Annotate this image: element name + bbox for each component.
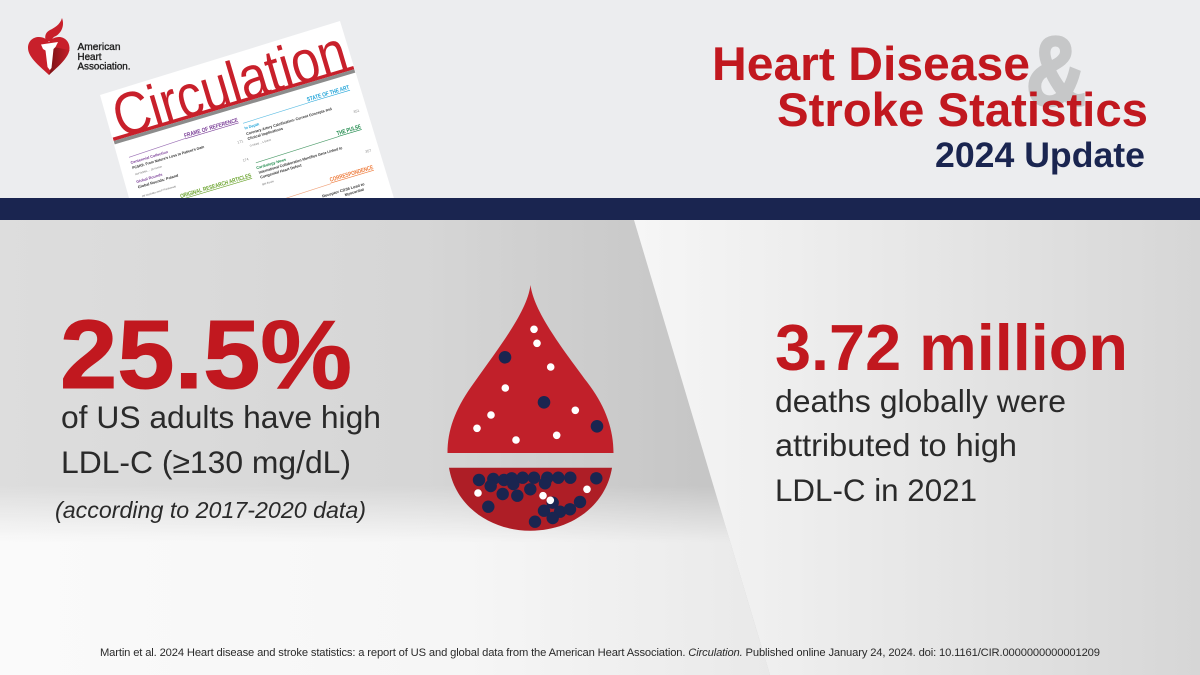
navy particles <box>473 351 603 528</box>
section: frame of reference: PCSK9: From Nature's Loss to Patient's Gain <box>132 145 205 170</box>
title block <box>712 16 1148 175</box>
section: the pulse <box>253 124 372 187</box>
section: frame of reference: JM Gierlotka and P Ponikowski <box>141 184 177 198</box>
description: deaths globally were <box>775 383 1066 419</box>
title line 1: Heart Disease <box>712 38 1030 91</box>
data note: (according to 2017-2020 data) <box>55 497 366 523</box>
section: the pulse: Congenital Heart Defect <box>260 163 303 180</box>
section: the pulse: International Collaboration Identifies Gene Linked to <box>258 146 343 175</box>
section: frame of reference <box>127 118 252 199</box>
masthead stripe <box>113 66 355 144</box>
right statistic: LDL-C in 2021 <box>775 472 977 508</box>
citation footer: Martin et al. 2024 Heart disease and stroke statistics: a report of US and global data from the American Heart Association. Circulation. Published online January 24, 2024. doi: 10.1161/CIR.0000000000001209 <box>100 647 1100 659</box>
section: correspondence: CORRESPONDENCE <box>329 165 374 184</box>
section: the pulse: 357 <box>365 148 372 154</box>
white particles <box>473 326 591 504</box>
journal page <box>100 21 396 205</box>
section: correspondence: Myocardial <box>344 188 364 197</box>
description: of US adults have high <box>61 399 381 435</box>
section: frame of reference: Centennial Collection <box>130 150 169 165</box>
section: state of the art: In Depth <box>244 122 260 130</box>
section: state of the art: Coronary Artery Calcification: Current Concepts and <box>246 107 333 136</box>
section: frame of reference: 171 <box>237 139 244 145</box>
logo wordmark: Association. <box>78 62 130 72</box>
section: frame of reference: AM Nobles ... JD Horton <box>135 164 163 176</box>
big number 25.5%: 25.5% <box>60 300 352 409</box>
icon: blood drop with cholesterol particles <box>448 285 614 531</box>
logo wordmark <box>78 42 130 72</box>
section: original research articles: ORIGINAL RESEARCH ARTICLES <box>180 173 252 200</box>
section: the pulse: Cardiology News <box>256 158 287 170</box>
section: state of the art: Clinical Implications <box>247 127 284 141</box>
top header background <box>0 0 1200 198</box>
upper drop <box>448 285 614 453</box>
journal cover: Circulation <box>100 21 394 198</box>
title line 2: Stroke Statistics <box>777 84 1148 137</box>
journal masthead: Circulation <box>105 17 355 150</box>
subtitle: 2024 Update <box>935 135 1145 175</box>
big number 3.72 million: 3.72 million <box>775 311 1128 384</box>
section: state of the art: 351 <box>353 109 360 114</box>
logo wordmark: American <box>78 42 120 53</box>
left statistic <box>55 300 381 523</box>
lower panel background <box>0 220 1200 675</box>
section: frame of reference: 174 <box>242 157 249 163</box>
section: frame of reference: Global Rounds: Poland <box>137 173 179 189</box>
section: frame of reference: Global Rounds <box>136 173 163 184</box>
American Heart Association logo <box>28 18 130 75</box>
ampersand: & <box>1026 16 1086 126</box>
section: correspondence <box>286 165 374 198</box>
section: state of the art: O Obeid ... L Eaton <box>249 137 272 148</box>
right statistic <box>775 311 1128 508</box>
navy divider band <box>0 198 1200 220</box>
lower drop with deposits <box>449 468 612 531</box>
right statistic: attributed to high <box>775 427 1017 463</box>
icon: heart and torch <box>28 18 70 75</box>
section: frame of reference: FRAME OF REFERENCE <box>184 118 239 139</box>
section: correspondence: Receptor CD36 Lead to <box>322 182 366 199</box>
section: state of the art: STATE OF THE ART <box>306 85 350 103</box>
left statistic: LDL-C (≥130 mg/dL) <box>61 444 351 480</box>
logo wordmark: Heart <box>78 52 102 63</box>
section: the pulse: THE PULSE <box>336 124 362 137</box>
section: the pulse: BW Eustis <box>262 179 275 186</box>
section: state of the art <box>241 84 361 148</box>
